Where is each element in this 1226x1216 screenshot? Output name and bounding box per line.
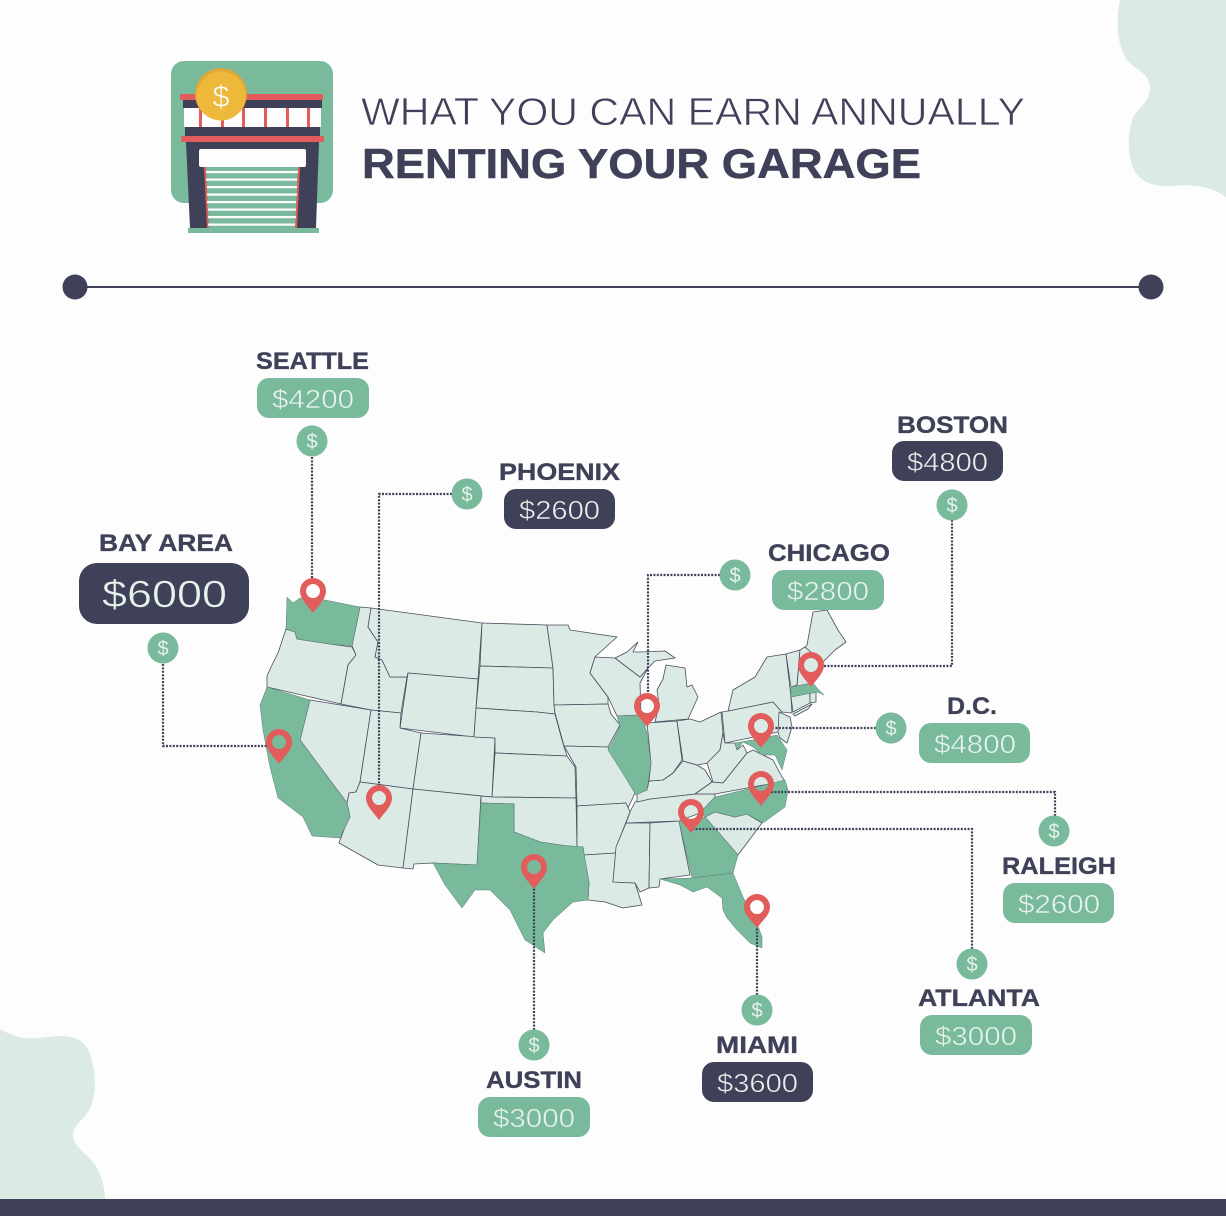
icon: dollar: $ — [729, 565, 741, 587]
icon: dollar: $ — [1048, 821, 1060, 843]
icon: dollar — [936, 490, 968, 520]
label: AUSTIN — [486, 1067, 582, 1094]
map: United States — [260, 597, 846, 953]
icon: dollar — [296, 426, 328, 456]
value badge: $3600 — [717, 1068, 798, 1098]
callout: Phoenix — [366, 459, 621, 820]
callout: Chicago — [634, 540, 890, 727]
icon: dollar — [956, 948, 988, 980]
icon: garage with dollar coin: $ — [212, 79, 230, 114]
label: BAY AREA — [99, 530, 233, 557]
icon: dollar — [148, 632, 178, 664]
icon: dollar: $ — [306, 431, 318, 453]
value badge — [504, 489, 615, 529]
icon: garage with dollar coin — [171, 61, 333, 233]
icon: dollar — [1038, 816, 1070, 846]
footer bar — [0, 1199, 1226, 1216]
value badge — [772, 570, 884, 610]
icon: dollar — [720, 560, 750, 590]
label: PHOENIX — [499, 459, 621, 486]
value badge: $4200 — [272, 384, 354, 414]
value badge: $2800 — [787, 576, 869, 606]
value badge — [919, 723, 1030, 763]
state: Georgia — [679, 817, 738, 878]
callout: Miami — [702, 894, 813, 1102]
pin — [266, 729, 292, 764]
icon: dollar: $ — [946, 495, 958, 517]
value badge: $2600 — [1018, 889, 1100, 919]
state: Massachusetts — [791, 683, 824, 697]
icon: dollar: $ — [966, 954, 978, 976]
icon: dollar: $ — [751, 1000, 763, 1022]
state: Washington — [286, 597, 360, 646]
icon: dollar: $ — [885, 718, 897, 740]
callout: Raleigh — [748, 771, 1116, 923]
value badge — [702, 1062, 813, 1102]
label: BOSTON — [897, 412, 1008, 439]
value badge: $4800 — [907, 447, 988, 477]
value badge: $6000 — [102, 574, 227, 616]
value badge — [257, 378, 369, 418]
callout: Austin — [478, 854, 590, 1137]
title line 1: WHAT YOU CAN EARN ANNUALLY — [361, 91, 1025, 134]
pin — [748, 771, 774, 806]
icon: dollar — [518, 1030, 550, 1060]
value badge — [892, 441, 1003, 481]
label: CHICAGO — [768, 540, 890, 567]
callout: Seattle — [256, 348, 369, 613]
icon: dollar — [742, 994, 772, 1026]
title — [361, 91, 1025, 187]
pin — [300, 578, 326, 613]
label: RALEIGH — [1002, 853, 1116, 880]
icon: dollar: $ — [157, 638, 169, 660]
pin — [678, 799, 704, 833]
pin — [798, 652, 824, 687]
icon: dollar: $ — [461, 484, 473, 506]
pin — [634, 693, 660, 727]
callout: Boston — [798, 412, 1008, 687]
callout: Atlanta — [678, 799, 1040, 1055]
state: North Carolina — [700, 780, 788, 823]
pin — [744, 894, 770, 928]
value badge — [1003, 883, 1114, 923]
value badge: $3000 — [493, 1103, 575, 1133]
value badge: $3000 — [935, 1021, 1017, 1051]
state: California — [260, 687, 350, 838]
value badge — [920, 1015, 1032, 1055]
label: SEATTLE — [256, 348, 369, 375]
label: MIAMI — [716, 1032, 798, 1059]
callout: Bay Area — [79, 530, 292, 764]
value badge: $2600 — [519, 495, 600, 525]
state: Illinois — [608, 715, 651, 795]
value badge — [79, 563, 249, 624]
value badge — [478, 1097, 590, 1137]
title line 2: RENTING YOUR GARAGE — [362, 140, 921, 187]
label: D.C. — [947, 693, 997, 720]
state: Texas — [433, 803, 589, 953]
callout: D.C. — [748, 693, 1030, 763]
pin — [521, 854, 547, 889]
state: Florida — [660, 873, 762, 948]
value badge: $4800 — [934, 729, 1016, 759]
icon: dollar: $ — [528, 1035, 540, 1057]
icon: dollar — [876, 712, 906, 744]
icon: dollar — [452, 478, 482, 510]
state: Maryland — [735, 735, 787, 770]
pin — [366, 785, 392, 820]
pin — [748, 713, 774, 748]
label: ATLANTA — [918, 985, 1040, 1012]
